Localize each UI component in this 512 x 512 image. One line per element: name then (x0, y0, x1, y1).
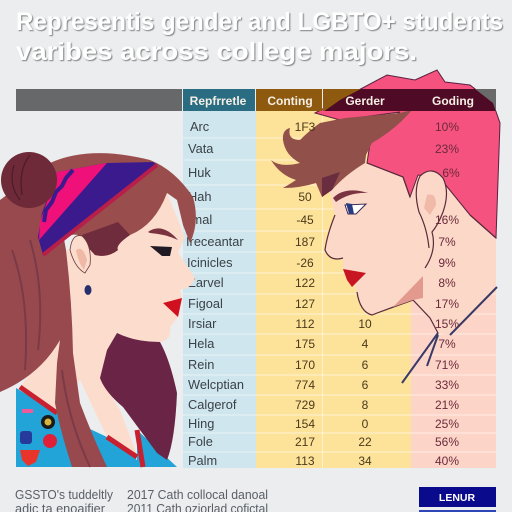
major labels column: Ireceantar (186, 234, 244, 249)
counting column values: 1F3 (295, 120, 316, 134)
major labels column: Arc (190, 119, 210, 134)
coding column values: 9% (438, 256, 456, 270)
major labels column: Zarvel (188, 275, 224, 290)
gender column values: 0 (362, 417, 369, 431)
illustration: man in profile (271, 70, 500, 383)
table background (183, 111, 496, 468)
major labels column: Vata (188, 141, 214, 156)
gender column values: 4 (362, 337, 369, 351)
coding column values: 15% (435, 317, 459, 331)
major labels column: Huk (188, 165, 211, 180)
major labels column: Rein (188, 357, 214, 372)
major labels column: Hah (188, 189, 211, 204)
coding column values: 56% (435, 435, 459, 449)
coding column values: 33% (435, 378, 459, 392)
counting column values: 113 (295, 454, 315, 468)
coding column values: 8% (438, 276, 456, 290)
lips (163, 298, 182, 317)
coding column values: 17% (435, 297, 459, 311)
major labels column: Icinicles (187, 255, 233, 270)
footer button (419, 487, 496, 512)
major labels column: Welcptian (188, 377, 244, 392)
footer text: 2017 Cath collocal danoal (127, 488, 268, 502)
gender column values: 10 (358, 317, 372, 331)
major labels column: Fole (188, 434, 213, 449)
coding column values (435, 120, 460, 468)
table header row (16, 89, 496, 111)
ear and earring (70, 236, 92, 295)
major labels column: Hing (188, 416, 214, 431)
coding column values: 10% (435, 120, 459, 134)
coding column values: 23% (435, 142, 459, 156)
table header row: Repfrretle (190, 94, 247, 108)
shirt badges (20, 409, 57, 466)
table header row: Conting (267, 94, 313, 108)
major labels column: Figoal (188, 296, 223, 311)
major labels column: Calgerof (188, 397, 237, 412)
coding column values: 6% (442, 166, 460, 180)
hair bun (1, 152, 57, 208)
gender column values: 22 (358, 435, 372, 449)
gender column values: 6 (362, 358, 369, 372)
major labels column: Imal (188, 212, 212, 227)
coding column values: 25% (435, 417, 459, 431)
counting column values: 154 (295, 417, 315, 431)
counting column values: 122 (295, 276, 315, 290)
counting column values: -26 (296, 256, 314, 270)
counting column values: 217 (295, 435, 315, 449)
counting column values: 170 (295, 358, 315, 372)
counting column values: 127 (295, 297, 315, 311)
illustration: woman in profile (0, 152, 196, 467)
coding column values: 7% (438, 337, 456, 351)
counting column values: 187 (295, 235, 315, 249)
counting column values: -45 (296, 213, 314, 227)
major labels column: Irsiar (188, 316, 217, 331)
counting column values (295, 120, 316, 468)
gender column values: 8 (362, 398, 369, 412)
eye and brow (148, 228, 178, 256)
major labels column: Palm (188, 453, 217, 468)
counting column values: 175 (295, 337, 315, 351)
table header row: Gerder (345, 94, 385, 108)
footer text: GSSTO's tuddeltly (15, 488, 114, 502)
title: varibes across college majors. (16, 38, 417, 66)
gender column values: 6 (362, 378, 369, 392)
coding column values: 7% (438, 235, 456, 249)
headband (38, 162, 157, 255)
counting column values: 112 (295, 317, 315, 331)
footer text (15, 488, 268, 512)
gender column values: 34 (358, 454, 372, 468)
coding column values: 40% (435, 454, 459, 468)
title: Representis gender and LGBTO+ students (16, 8, 503, 36)
coding column values: 71% (435, 358, 459, 372)
major labels column: Hela (188, 336, 215, 351)
title (16, 8, 503, 66)
counting column values: 729 (295, 398, 315, 412)
coding column values: 21% (435, 398, 459, 412)
table header row: Goding (432, 94, 474, 108)
footer button: LENUR (439, 492, 475, 504)
coding column values: 16% (435, 213, 459, 227)
counting column values: 774 (295, 378, 315, 392)
major labels column (186, 119, 244, 468)
counting column values: 50 (298, 190, 312, 204)
gender column values (358, 317, 372, 468)
